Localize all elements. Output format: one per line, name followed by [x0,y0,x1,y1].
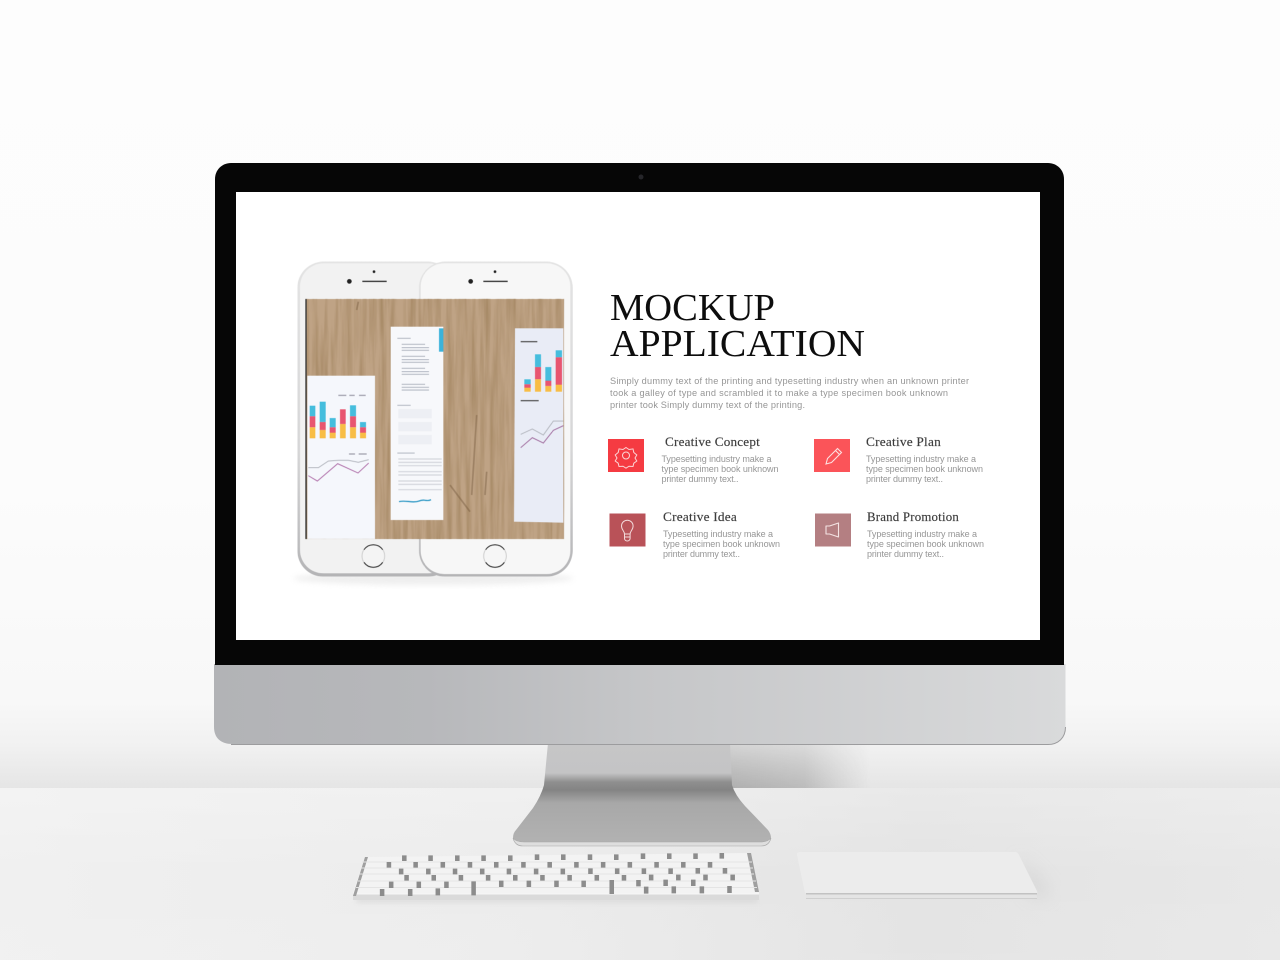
description [867,529,984,559]
right paper with charts [514,328,563,523]
icon: light bulb [610,514,646,546]
intro paragraph [610,376,969,410]
monitor bezel [215,163,1064,665]
trackpad [797,852,1050,899]
stacked bar chart [310,402,366,438]
monitor screen [236,192,1040,640]
description [663,529,780,559]
intro paragraph: printer took Simply dummy text of the printing. [610,400,805,410]
title: MOCKUP [610,287,775,329]
monitor chin [214,664,1066,744]
trackpad shadow [1016,856,1050,898]
description: printer dummy text.. [663,549,740,559]
heading: Brand Promotion [867,510,960,524]
description: type specimen book unknown [866,464,983,474]
intro paragraph: Simply dummy text of the printing and typesetting industry when an unknown printer [610,376,969,386]
description: type specimen book unknown [663,539,780,549]
intro paragraph: took a galley of type and scrambled it to make a type specimen book unknown [610,388,948,398]
keyboard [353,853,759,903]
item: Brand Promotion [815,510,984,559]
left paper with charts [307,376,375,539]
heading: Creative Idea [663,510,737,524]
phones illustration [293,262,573,585]
desk surface [0,788,1280,960]
title: APPLICATION [610,323,865,365]
heading: Creative Plan [866,435,942,449]
description: type specimen book unknown [662,464,778,474]
line chart [308,460,369,481]
left phone [297,262,454,577]
icon: pencil [814,439,850,472]
description: Typesetting industry make a [866,454,976,464]
description: printer dummy text.. [662,474,738,484]
description: Typesetting industry make a [663,529,773,539]
icon: gear flower [608,439,644,472]
icon: megaphone [815,514,851,546]
item: Creative Plan [814,435,983,484]
item: Creative Concept [608,435,778,484]
description: printer dummy text.. [867,549,944,559]
phone shadow [293,572,573,585]
description [866,454,983,484]
trackpad surface [797,852,1037,894]
keyboard shadow [356,898,758,903]
description: Typesetting industry make a [867,529,977,539]
description [662,454,778,484]
stacked bar chart [524,350,562,392]
wall shadow beside stand [730,745,856,788]
heading: Creative Concept [665,435,760,449]
wooden desk photo on screens [305,299,564,539]
title [610,287,865,365]
keyboard body [353,853,759,899]
description: Typesetting industry make a [662,454,772,464]
right phone [419,262,573,577]
monitor stand [513,743,771,846]
monitor [214,163,1066,744]
webcam [638,174,644,180]
middle paper resume [391,327,443,520]
line chart [521,421,563,448]
item: Creative Idea [610,510,780,559]
description: type specimen book unknown [867,539,984,549]
description: printer dummy text.. [866,474,943,484]
key gaps [382,853,733,896]
